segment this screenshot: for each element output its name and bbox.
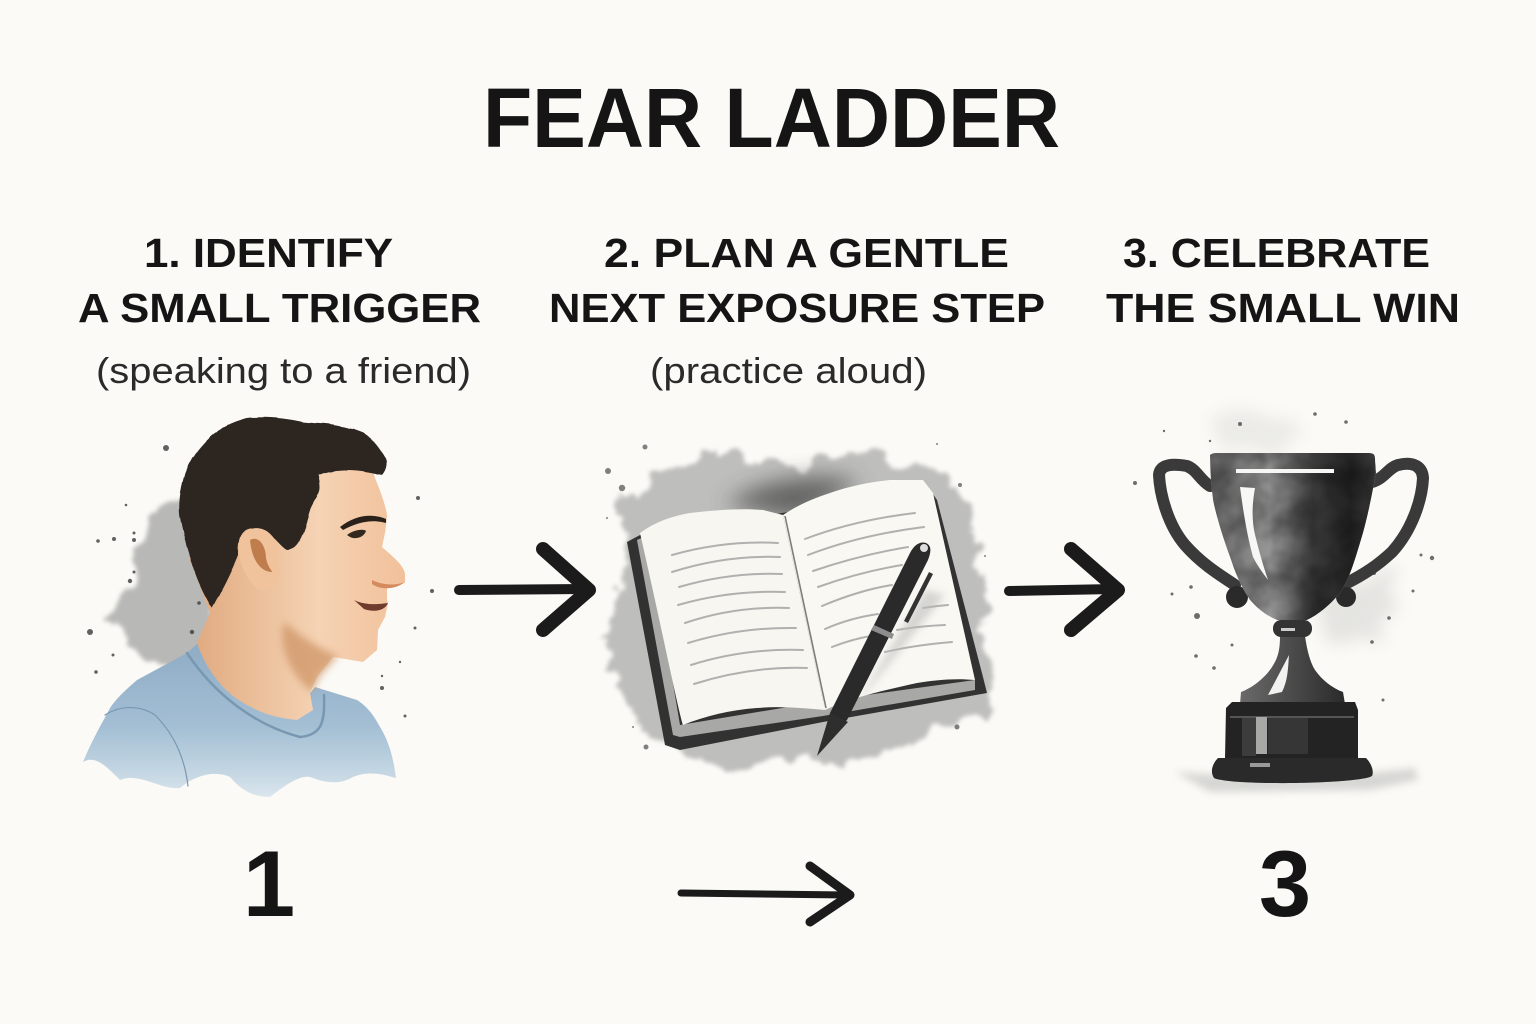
eyebrow and eye: [340, 516, 386, 530]
ink wash: [1207, 414, 1303, 450]
step 2 heading: [549, 230, 1045, 331]
book cover: [627, 490, 987, 750]
pen: [830, 542, 930, 722]
ink wash: [605, 450, 990, 770]
step 2 heading: 2. PLAN A GENTLE: [604, 230, 1009, 276]
hair: [179, 417, 387, 608]
stem: [1240, 636, 1345, 704]
step 2 heading: NEXT EXPOSURE STEP: [549, 285, 1045, 331]
jaw shadow: [282, 622, 338, 692]
arrow: step 2 to 3: [1009, 549, 1118, 630]
step 3 heading: [1106, 230, 1460, 331]
page lines: [672, 513, 952, 684]
bottom number 1: 1: [243, 831, 295, 936]
base: [1225, 702, 1358, 758]
bowl: [1210, 453, 1376, 620]
icon: open book with pen: [605, 443, 990, 770]
left page: [640, 509, 825, 725]
plinth: [1212, 758, 1373, 783]
ink wash behind head: [110, 495, 225, 670]
step 1 heading: [78, 230, 481, 331]
step 3 heading: THE SMALL WIN: [1106, 285, 1460, 331]
right page: [783, 480, 975, 710]
step 1 heading: 1. IDENTIFY: [144, 230, 393, 276]
step 3 heading: 3. CELEBRATE: [1123, 230, 1430, 276]
title: FEAR LADDER: [483, 71, 1060, 165]
page block edge: [637, 535, 975, 737]
neck and face: [190, 450, 405, 720]
step 2 note: (practice aloud): [650, 350, 927, 391]
icon: trophy: [1133, 412, 1434, 792]
bowl highlights: [1236, 469, 1334, 473]
nose shadow: [372, 580, 405, 588]
shirt seams: [105, 653, 324, 786]
step 1 note: (speaking to a friend): [96, 350, 471, 391]
bottom number 3: 3: [1259, 831, 1311, 936]
mouth: [354, 600, 388, 611]
icon: person in profile: [83, 417, 434, 797]
step 1 heading: A SMALL TRIGGER: [78, 285, 481, 331]
arrow: step 1 to 2: [459, 549, 589, 630]
handles: [1159, 464, 1423, 585]
ear: [238, 528, 280, 590]
shirt: [83, 643, 396, 797]
bottom arrow: [681, 866, 850, 922]
pen shadow: [850, 590, 945, 715]
